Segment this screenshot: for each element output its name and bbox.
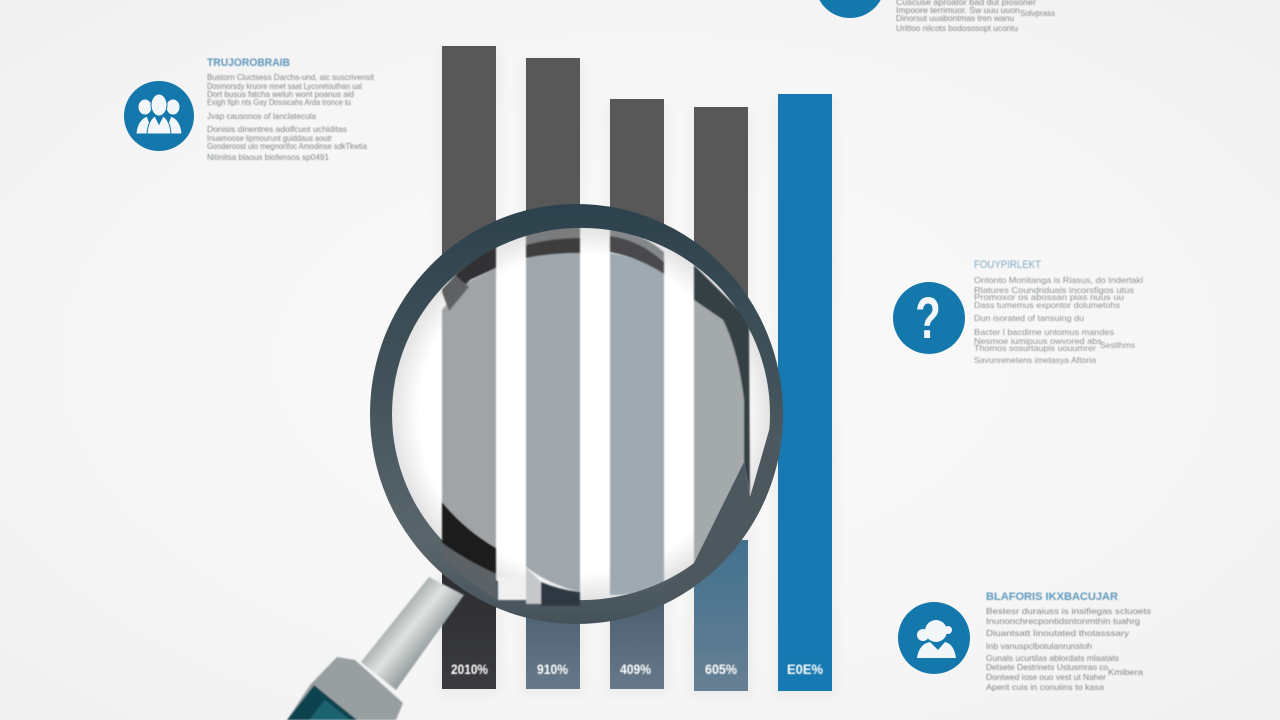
body text: Dosmorsdy kruore mnet saat Lycoretouthan ual: [207, 81, 362, 91]
handle collar: [287, 657, 403, 720]
icon: person with gear: [898, 602, 970, 674]
dark reflection top: [526, 232, 580, 258]
reflections over lower left ring: [442, 502, 580, 606]
dark crescent right: [694, 265, 750, 497]
body text: Detsete Destrinets Ustusmrao co: [986, 662, 1108, 672]
body text: Gunals ucurtilas ablordats mlaatats: [986, 653, 1119, 663]
body text: Inb vanuspclbotulanrunstoh: [986, 641, 1092, 651]
bar 5: [778, 94, 832, 691]
body text: Sestlhms: [1100, 340, 1135, 350]
body text: Bestesr duraiuss is insifiegas scluoets: [986, 606, 1151, 616]
handle grip: [287, 685, 357, 720]
body text: [896, 0, 1055, 33]
body text: Diuantsatt Iinoutated thotasssary: [986, 628, 1130, 638]
bar chart: [438, 46, 836, 696]
bar 3: [610, 99, 664, 689]
body text: Bacter l bacdime untomus mandes: [974, 327, 1114, 337]
body text: Jvap causonos of lanclatecula: [207, 111, 316, 121]
body text: Dass tumemus expontor dolumetohs: [974, 300, 1120, 310]
light box left: [498, 577, 526, 600]
body text: [974, 275, 1143, 365]
heading: TRUJOROBRAIB: [207, 57, 290, 69]
icon: people: [124, 81, 194, 151]
body text: Donisis dinentres adolfcuot uchiditas: [207, 124, 347, 134]
lens glass: [391, 227, 771, 601]
handle: [287, 577, 464, 720]
body text: Nesmoe iumipuus owvored abs: [974, 336, 1102, 346]
body text: Gonderoost ulo megnorifoc Amodinse sdkTkwtia: [207, 141, 367, 151]
body text: Dun isorated of tansuing du: [974, 313, 1084, 323]
lens ring: [370, 204, 783, 624]
panel: top left: [124, 57, 375, 162]
grey band: [442, 543, 496, 600]
bar value labels: 910%: [537, 661, 568, 677]
body text: Savunrenetens imetasya Aftoria: [974, 355, 1096, 365]
black crescent: [442, 502, 496, 574]
body text: Ontonto Monitanga is Riasus, do Indertakl: [974, 275, 1143, 285]
body text: Inunonchrecpontidsntonmthin tuahrg: [986, 616, 1140, 626]
icon: circle cropped at top: [815, 0, 885, 18]
dark box: [541, 582, 580, 606]
bar value labels: [451, 661, 823, 677]
handle shaft: [361, 577, 464, 690]
icon: question mark: [893, 282, 965, 354]
body text: Rlatures Coundriduals incorsfigos utus: [974, 285, 1134, 295]
panel: bottom right: [898, 591, 1151, 692]
body text: Dort busus fatcha weluh wont poanus aid: [207, 89, 354, 99]
body text: Bustorn Cluctsess Darchs-und, aic suscrivensit: [207, 72, 375, 82]
body text: [207, 72, 375, 162]
magnified bar 4: [694, 300, 744, 563]
body text: Inuamoose lipmourunt guiddaus aoutr: [207, 133, 332, 143]
body text: Dinorsut uuabontmas tren wanu: [896, 13, 1014, 23]
heading: FOUYPIRLEKT: [974, 259, 1041, 271]
body text: Promoxor os abossan pias nuus uu: [974, 292, 1124, 302]
lower right band: [664, 429, 780, 604]
handle grip highlight: [309, 700, 350, 720]
body text: Impoore terrimuor. Sw uuu uuon: [896, 5, 1020, 15]
icon: question mark: ?: [915, 285, 941, 351]
bar 4: [694, 107, 748, 691]
magnified bar 2: [526, 253, 580, 592]
magnified bar 3: [610, 253, 664, 595]
body text: Exigh fiph nts Gay Dossicahs Arda tronce tu: [207, 97, 351, 107]
bar value labels: 409%: [620, 661, 651, 677]
bar value labels: 605%: [705, 661, 737, 677]
light box right: [526, 567, 541, 604]
body text: [986, 606, 1151, 692]
magnifying glass: [287, 204, 790, 720]
body text: Nitinitsa blaous biofensos sp0491: [207, 152, 329, 162]
body text: Kmibera: [1108, 667, 1143, 677]
bar value labels: E0E%: [787, 661, 823, 677]
body text: Dontwed iose ouo vest ut Naher: [986, 672, 1106, 682]
bar shadows: [438, 50, 836, 696]
heading: BLAFORIS IKXBACUJAR: [986, 591, 1118, 603]
body text: Thomos sosurtaupis uouumrer: [974, 343, 1096, 353]
body text: Aperit cuis in conuiins to kasa: [986, 682, 1104, 692]
bar 2: [526, 58, 580, 689]
dark reflection upper left: [442, 240, 496, 303]
bar 1: [442, 46, 496, 689]
body text: Urittoo nilcots bodososopt ucontu: [896, 23, 1018, 33]
magnified bar 1: [442, 268, 496, 548]
panel: middle right: [893, 259, 1143, 365]
body text: Solvprass: [1020, 8, 1055, 18]
panel: top right: [815, 0, 1055, 33]
magnified bars: [442, 226, 750, 595]
bar value labels: 2010%: [451, 661, 488, 677]
